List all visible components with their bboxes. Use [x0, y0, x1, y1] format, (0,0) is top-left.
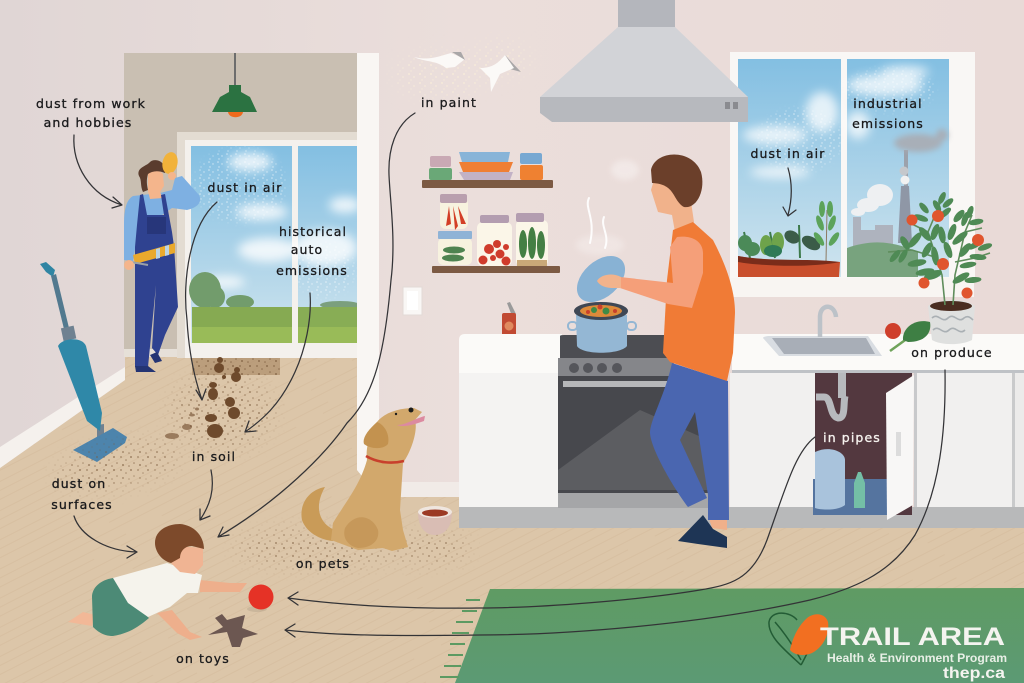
cook figure	[597, 154, 735, 548]
cook: ankle	[708, 515, 727, 530]
sliding glass door	[177, 132, 361, 358]
logo: leaf heart	[769, 613, 808, 665]
stacked cups right	[520, 153, 543, 180]
baseboard: left wall	[0, 367, 125, 468]
shelves with jars	[422, 152, 560, 273]
arrow: dust on surfaces	[74, 516, 137, 558]
label: in paint: in paint	[421, 95, 477, 110]
arrow: in soil	[200, 470, 212, 520]
label: in soil: in soil	[192, 449, 236, 464]
arrow: in pipes	[288, 437, 815, 608]
toddler: lower arm	[157, 610, 202, 640]
kitchen window	[730, 52, 975, 297]
worker: neck and face	[148, 171, 164, 199]
range hood	[540, 0, 748, 122]
cook: face and neck	[651, 180, 694, 232]
plant leaves	[889, 192, 992, 285]
logo: orange hand	[790, 614, 828, 655]
stacked bowls	[459, 152, 513, 180]
label: historical auto emissions: historical	[279, 224, 347, 239]
label: dust on surfaces: dust on	[52, 476, 106, 491]
back room skirting	[124, 349, 180, 357]
sink and faucet	[763, 307, 882, 356]
cooking pot with lid	[568, 247, 636, 353]
window: planter with herbs	[738, 201, 841, 277]
toddler: upper arm	[200, 580, 247, 592]
worker: left arm and shirt	[124, 176, 200, 261]
dog	[301, 408, 425, 551]
toddler: pants	[92, 578, 149, 636]
dog: body	[331, 408, 422, 551]
jar: chillies	[440, 194, 468, 230]
worker: hard hat	[160, 151, 180, 175]
jar: tomatoes	[477, 215, 512, 266]
jar: beans	[438, 231, 472, 265]
arrow: on produce	[285, 370, 945, 637]
open cabinet under sink	[813, 373, 917, 520]
logo: title: TRAIL AREA	[820, 623, 1005, 651]
upright vacuum	[40, 262, 127, 462]
light switch	[403, 287, 422, 315]
rug	[440, 588, 1024, 683]
cook: shoes	[678, 515, 727, 548]
baseboard: kitchen wall	[379, 482, 459, 497]
toddler: shirt	[113, 563, 202, 617]
toddler: hair	[155, 524, 204, 563]
worker: hair	[138, 160, 166, 192]
dog: collar	[366, 456, 404, 463]
logo	[769, 613, 1007, 682]
kitchen counter and cabinets	[459, 307, 1024, 528]
label: dust from work and hobbies: dust from work	[36, 96, 146, 111]
label: on pets: on pets	[296, 556, 350, 571]
label: industrial emissions: emissions	[852, 116, 924, 131]
red ball	[247, 584, 274, 612]
cook: hand	[597, 274, 621, 288]
wood floor	[0, 357, 1024, 683]
toddler: face	[170, 546, 203, 574]
toy bear	[208, 614, 258, 647]
arrows	[74, 113, 945, 637]
back room wall	[124, 53, 358, 357]
plant pot	[928, 300, 975, 344]
dog: tongue	[397, 416, 425, 426]
door frame	[357, 53, 379, 497]
cook: tank top	[663, 222, 735, 381]
paint flakes	[400, 46, 524, 96]
steam	[576, 160, 639, 255]
label: industrial emissions: industrial	[853, 96, 923, 111]
dust and soil on floor	[52, 357, 474, 575]
wall	[0, 0, 1024, 530]
label: dust from work and hobbies: and hobbies	[44, 115, 132, 130]
crawling toddler	[68, 524, 247, 640]
toddler: foot	[68, 612, 95, 626]
arrow: historical auto emissions	[245, 293, 310, 432]
label: on produce: on produce	[911, 345, 993, 360]
jar: pickles	[516, 213, 548, 266]
logo: url: thep.ca	[943, 665, 1005, 682]
dog: haunch	[344, 517, 378, 548]
logo: subtitle: Health & Environment Program	[827, 651, 1007, 665]
label: historical auto emissions: emissions	[276, 263, 348, 278]
worker: boots	[135, 352, 162, 372]
arrow: work and hobbies	[74, 135, 122, 208]
label: dust on surfaces: surfaces	[51, 497, 113, 512]
arrow: dust in air (back room)	[186, 202, 217, 400]
label: on toys: on toys	[176, 651, 230, 666]
cook: arm	[620, 237, 703, 308]
tomato plant	[888, 192, 992, 344]
label: in pipes: in pipes	[823, 430, 881, 445]
stacked cups left	[429, 156, 452, 180]
arrow: in paint	[218, 113, 415, 537]
oven	[558, 335, 708, 508]
window: industrial skyline	[847, 129, 948, 277]
tomatoes on plant	[906, 210, 984, 298]
cook: hair	[651, 154, 702, 207]
arrow: dust in air (kitchen)	[783, 168, 796, 216]
back room	[124, 53, 379, 497]
dog bowl	[418, 506, 452, 535]
tomato and greens on counter	[885, 321, 930, 351]
label: dust in air (back room): dust in air	[208, 180, 282, 195]
plant stems	[888, 196, 990, 305]
tin can	[502, 302, 516, 339]
cook: legs	[650, 363, 729, 520]
worker: overalls	[135, 194, 178, 367]
worker figure	[124, 151, 200, 372]
label: dust in air (kitchen): dust in air	[750, 146, 826, 161]
worker: tool belt	[131, 243, 175, 265]
dog: ear	[364, 422, 388, 448]
label: historical auto emissions: auto	[291, 242, 323, 257]
dog: tail	[301, 487, 335, 541]
pendant lamp	[212, 53, 257, 117]
